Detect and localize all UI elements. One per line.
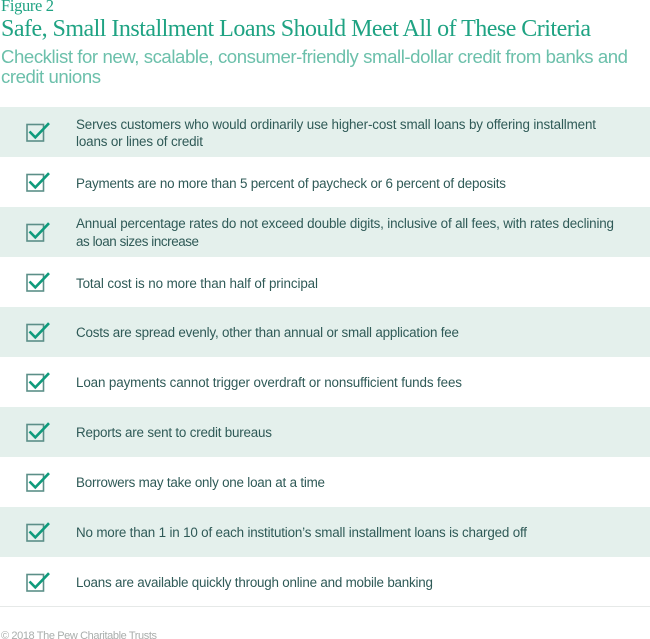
row 3: Annual percentage rates do not exceed double digits, inclusive of all fees, with rates declining (76, 216, 614, 231)
row 3 (0, 207, 650, 257)
row 4: Total cost is no more than half of principal (76, 276, 318, 291)
row 1 (0, 107, 650, 157)
row 6: Loan payments cannot trigger overdraft or nonsufficient funds fees (76, 375, 462, 390)
subtitle (1, 46, 628, 87)
row 2: Payments are no more than 5 percent of paycheck or 6 percent of deposits (76, 176, 506, 191)
subtitle: Checklist for new, scalable, consumer-friendly small-dollar credit from banks and (1, 46, 628, 67)
row 8: Borrowers may take only one loan at a time (76, 475, 325, 490)
row 5 (0, 307, 650, 357)
row 1: Serves customers who would ordinarily use higher-cost small loans by offering installment (76, 117, 596, 132)
row 10: Loans are available quickly through online and mobile banking (76, 575, 433, 590)
row 7: Reports are sent to credit bureaus (76, 425, 272, 440)
row 7 (0, 407, 650, 457)
title: Safe, Small Installment Loans Should Meet All of These Criteria (1, 16, 591, 42)
row 1: loans or lines of credit (76, 134, 203, 149)
row 9: No more than 1 in 10 of each institution’s small installment loans is charged off (76, 525, 527, 540)
row 9 (0, 507, 650, 557)
checklist table (0, 107, 650, 591)
row 3: as loan sizes increase (76, 234, 199, 249)
row 5: Costs are spread evenly, other than annual or small application fee (76, 325, 459, 340)
subtitle: credit unions (1, 66, 101, 87)
